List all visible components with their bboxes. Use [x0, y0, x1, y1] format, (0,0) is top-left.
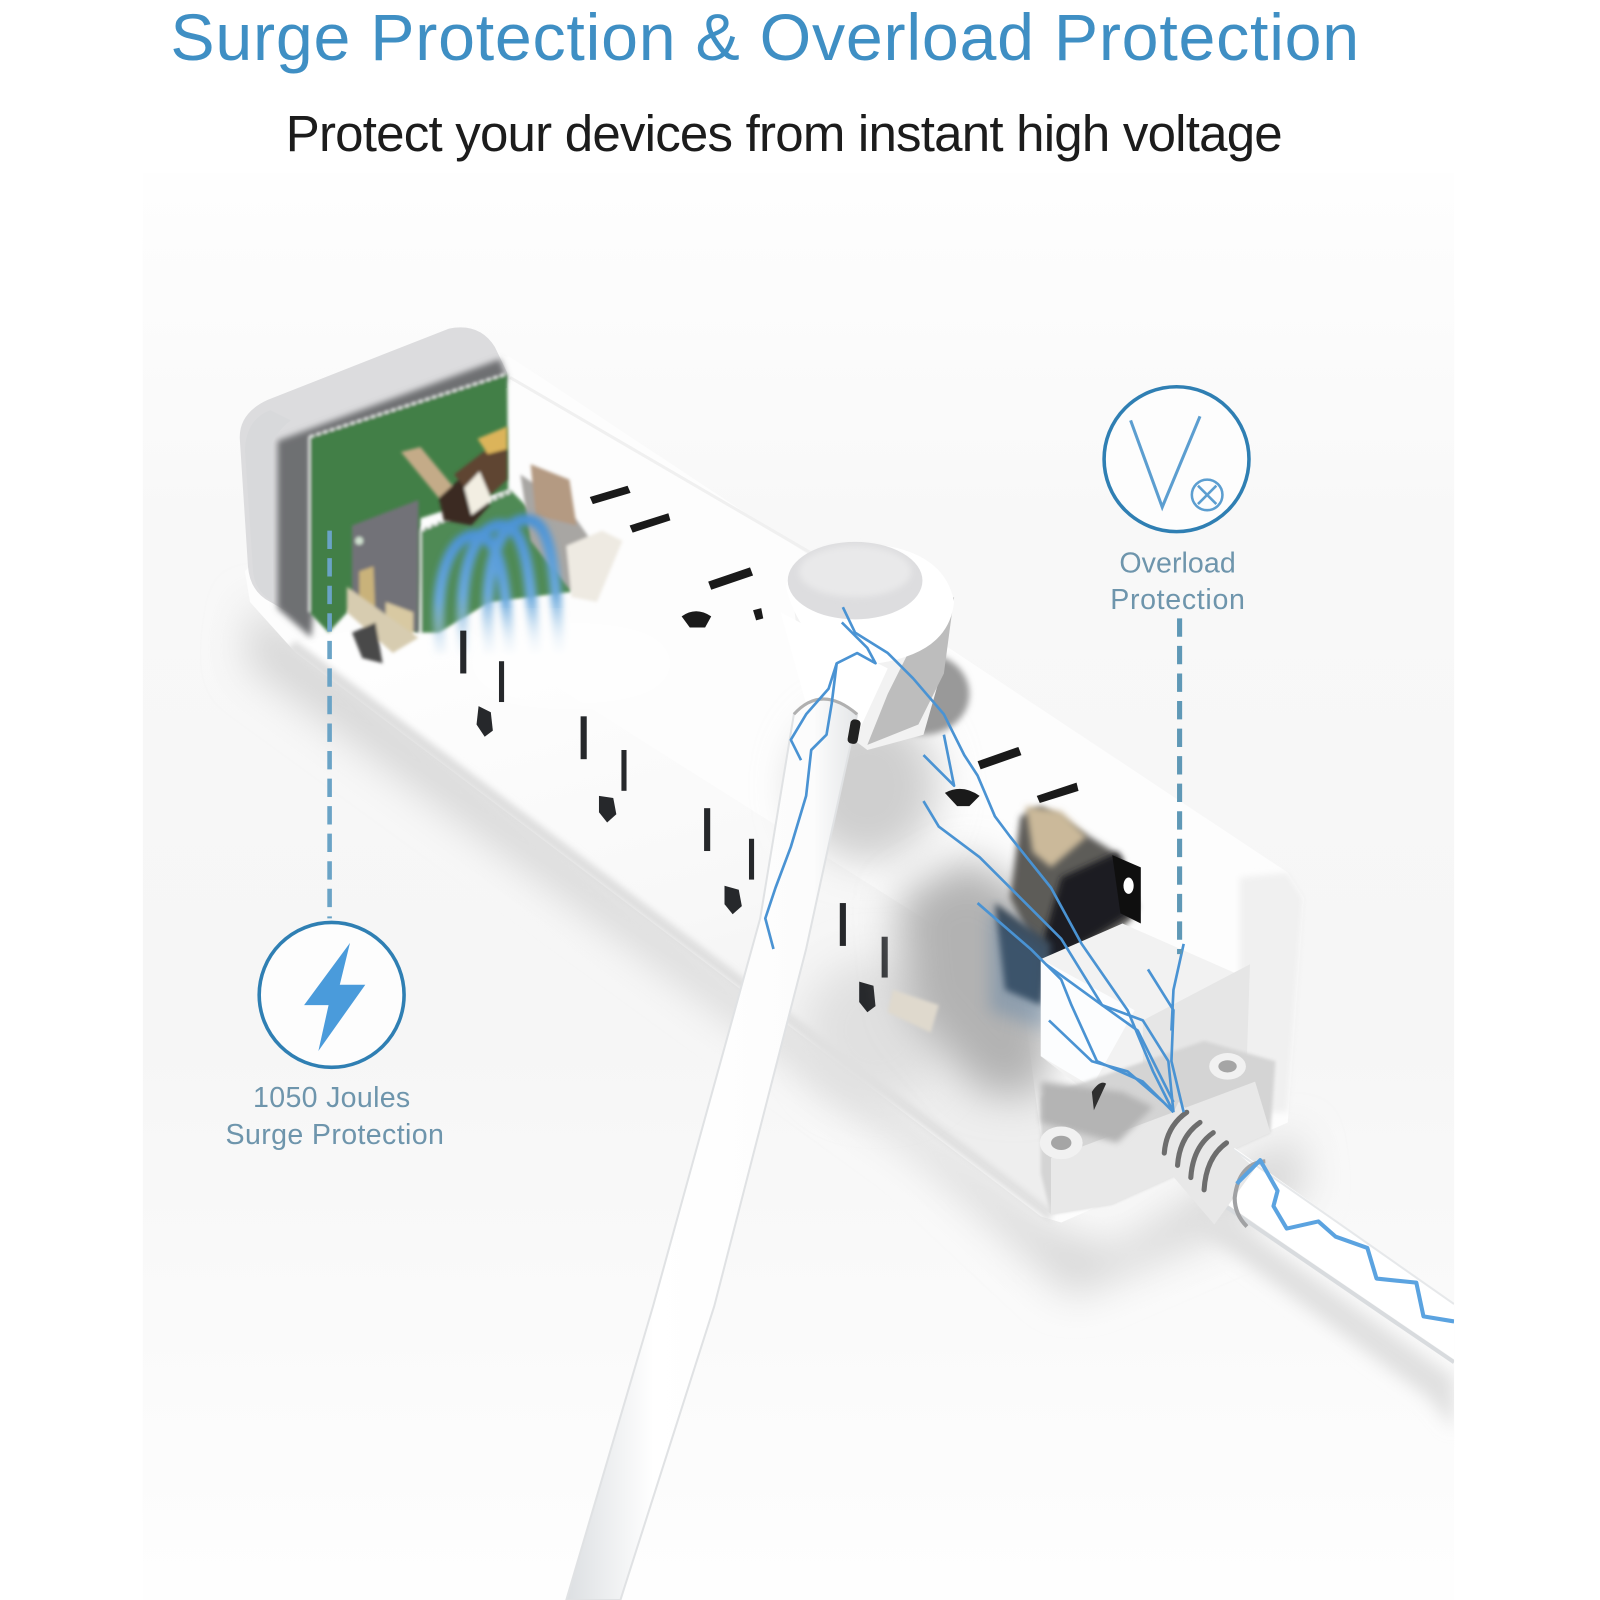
- top face outlet slots: [590, 486, 1079, 806]
- power strip illustration: [240, 327, 1454, 1600]
- surge label: 1050 Joules: [253, 1082, 410, 1114]
- callout: overload protection: [1104, 387, 1249, 954]
- lightning arcs: [765, 607, 1454, 1321]
- strip ground shadow: [245, 602, 1306, 1296]
- front cord: [566, 699, 861, 1600]
- title: Surge Protection & Overload Protection: [170, 1, 1359, 75]
- strip body: [245, 347, 1304, 1222]
- white switch block: [1041, 923, 1250, 1092]
- icon: overload V badge: [1104, 387, 1249, 532]
- overload label: Overload: [1119, 547, 1236, 579]
- screw base block: [1040, 1041, 1276, 1214]
- subtitle: Protect your devices from instant high voltage: [286, 105, 1283, 162]
- head end cap: [240, 327, 507, 638]
- front face outlets: [460, 631, 888, 1012]
- right cord: [1218, 1148, 1454, 1421]
- white fade over coil: [504, 610, 564, 650]
- transparent interior right: [888, 806, 1141, 1097]
- overload label second line: Protection: [1110, 584, 1245, 616]
- icon: lightning bolt badge: [259, 922, 404, 1067]
- dashed leader right: [1177, 618, 1182, 954]
- knob cylinder: [781, 542, 969, 750]
- callout: surge protection: [226, 531, 444, 1151]
- surge label second line: Surge Protection: [226, 1119, 444, 1151]
- circuit board: [309, 373, 571, 633]
- internal components left: [347, 427, 622, 663]
- copper coil in blue: [439, 520, 559, 653]
- dashed leader left: [327, 531, 332, 918]
- cord strain relief: [1153, 1102, 1265, 1227]
